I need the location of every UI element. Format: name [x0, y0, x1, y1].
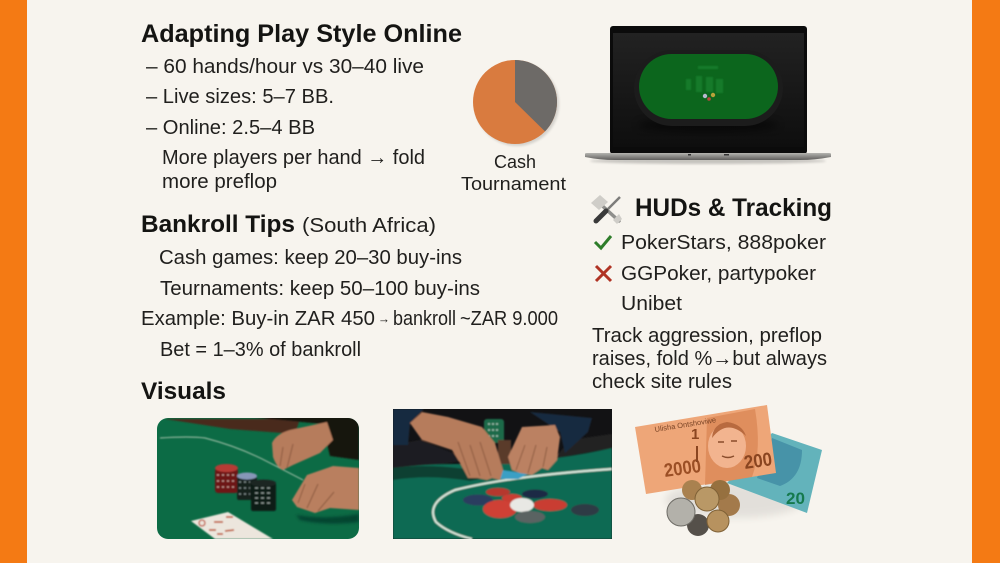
- photo: hands with chip stacks: [157, 417, 359, 539]
- text: hands per hour: – 60 hands/hour vs 30–40 live: [146, 56, 424, 78]
- banknote: 200 rand: Ulisha Ontshoviwe: [654, 415, 717, 434]
- pie label: cash: Cash: [494, 152, 536, 172]
- banknote: 20 rand: 20: [786, 489, 805, 508]
- banknote: 20 rand: [727, 433, 822, 513]
- icon: cross mark: [596, 266, 611, 281]
- right orange band: [972, 0, 1000, 563]
- panel: bankroll tips: [141, 211, 558, 361]
- icon: crossed hammer and screwdriver: [591, 195, 622, 224]
- text: tournaments: Teurnaments: keep 50–100 buy-ins: [160, 278, 480, 300]
- text: bet size: Bet = 1–3% of bankroll: [160, 339, 361, 361]
- banknote: 200 rand: 1: [691, 426, 699, 443]
- photo: hands pushing chips: [393, 409, 612, 539]
- heading: bankroll tips: Bankroll Tips: [141, 211, 295, 238]
- text: more players per hand: More players per hand → fold: [162, 147, 425, 169]
- heading suffix: south africa: (South Africa): [302, 215, 436, 237]
- coins: [667, 480, 740, 536]
- text: track aggression: Track aggression, preflop: [592, 325, 822, 347]
- text: pokerstars, 888poker: PokerStars, 888poker: [621, 232, 826, 254]
- heading: visuals: Visuals: [141, 378, 226, 405]
- heading: huds and tracking: HUDs & Tracking: [635, 194, 832, 222]
- banknote: 200 rand: [635, 405, 776, 494]
- text: ggpoker, partypoker: GGPoker, partypoker: [621, 263, 816, 285]
- pie chart: cash vs tournament: [461, 60, 566, 194]
- illustration: rand banknotes and coins: [635, 405, 822, 536]
- text: raises, fold: raises, fold %→but always: [592, 348, 827, 370]
- panel: huds and tracking: [591, 194, 832, 393]
- text: example: Example: Buy-in ZAR 450: [141, 308, 375, 330]
- text: example: bankroll: [393, 308, 456, 330]
- pie label: tournament: Tournament: [461, 174, 566, 194]
- text: cash games: Cash games: keep 20–30 buy-ins: [159, 247, 462, 269]
- text: example: [141, 308, 558, 330]
- banknote: 200 rand: 2000: [663, 456, 702, 482]
- illustration: laptop with poker table: [585, 26, 831, 164]
- text: online sizes: – Online: 2.5–4 BB: [146, 117, 315, 139]
- panel: adapting play style online: [141, 20, 462, 193]
- banknote: 200 rand: 200: [743, 449, 773, 474]
- left orange band: [0, 0, 27, 563]
- text: check site rules: check site rules: [592, 371, 732, 393]
- text: example: ~ZAR 9.000: [460, 308, 558, 330]
- text: more preflop: more preflop: [162, 171, 277, 193]
- text: live sizes: – Live sizes: 5–7 BB.: [146, 86, 334, 108]
- text: example: →: [378, 311, 390, 326]
- icon: check mark: [595, 236, 611, 248]
- heading: adapting play style: Adapting Play Style Online: [141, 20, 462, 48]
- text: unibet: Unibet: [621, 293, 682, 315]
